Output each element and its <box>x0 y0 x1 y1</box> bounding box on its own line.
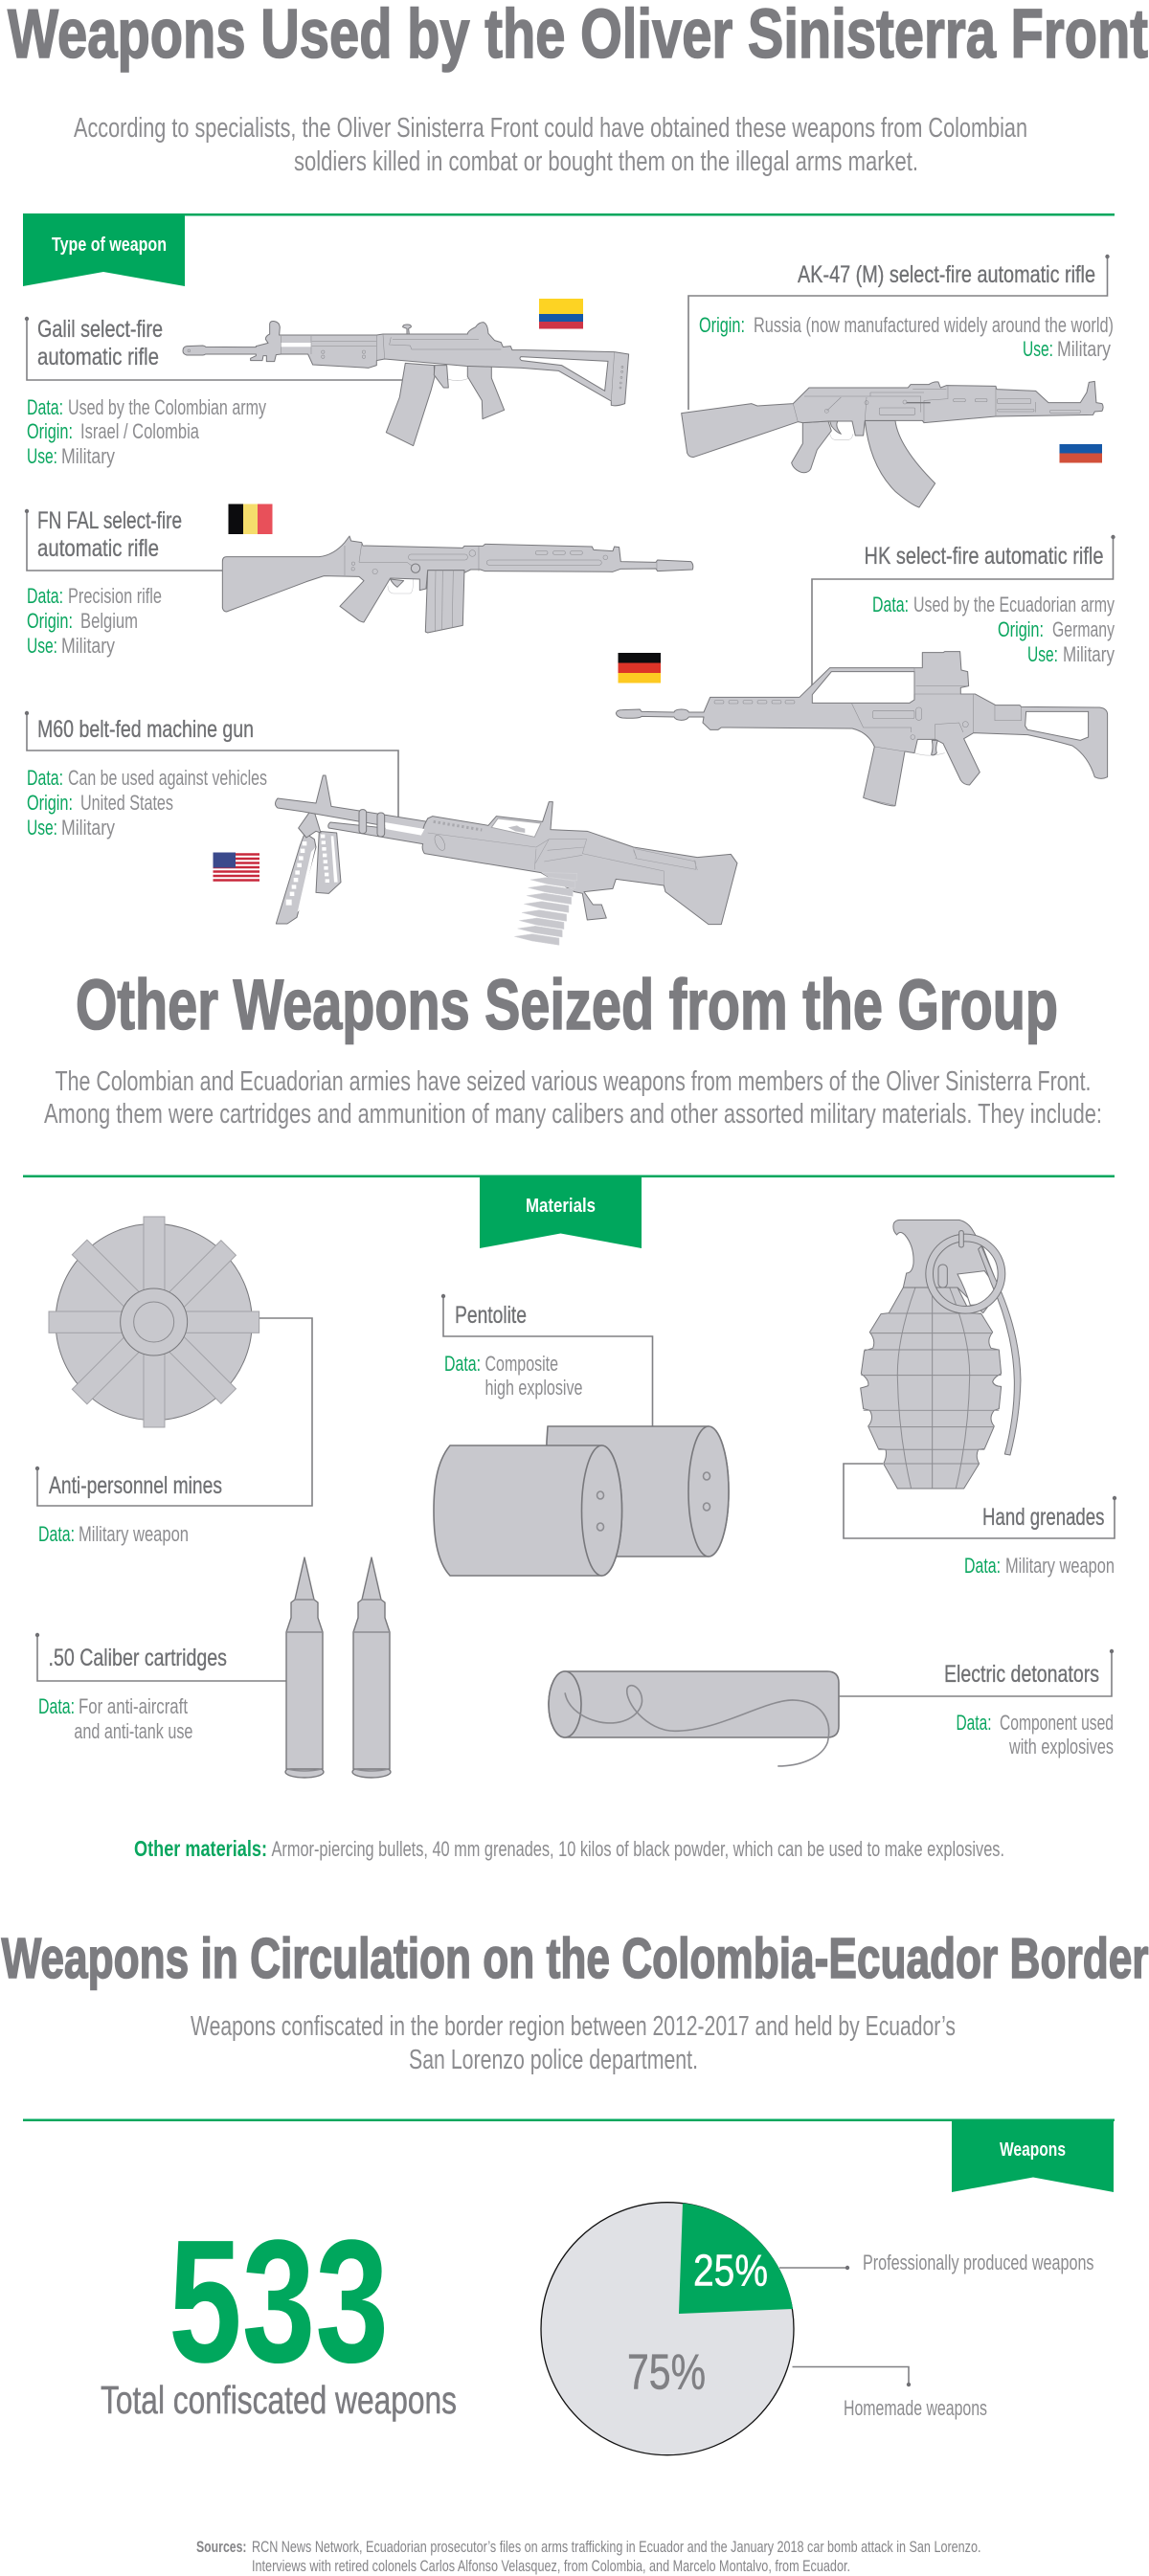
facts: mines: Data: <box>38 1522 75 1546</box>
facts: detonators: Data: <box>956 1711 992 1735</box>
facts: cartridges: and anti-tank use <box>74 1719 192 1743</box>
paragraph: confiscated weapons: San Lorenzo police department. <box>409 2045 698 2075</box>
other materials note <box>134 1836 1004 1861</box>
section rule and ribbon: weapons: Weapons <box>1000 2139 1066 2161</box>
heading: Galil: Galil select-fire <box>37 316 163 343</box>
icon: FN FAL rifle <box>222 536 693 633</box>
section rule and ribbon: type of weapon <box>23 213 1115 286</box>
pie label: 25%: 25% <box>693 2246 768 2296</box>
facts: FN FAL: Belgium <box>80 609 138 633</box>
callout leader: HK <box>812 535 1115 691</box>
intro paragraph <box>74 113 1027 177</box>
callout leader: mines <box>35 1318 312 1506</box>
sources: Sources: <box>196 2538 247 2556</box>
section rule and ribbon: materials: Materials <box>526 1196 596 1217</box>
icon: Belgium flag <box>228 504 272 534</box>
panel: FN FAL <box>25 504 693 658</box>
facts: mines: Military weapon <box>79 1522 189 1546</box>
facts: FN FAL <box>27 584 162 658</box>
facts: detonators: with explosives <box>1008 1735 1114 1758</box>
facts: Galil: Data: <box>27 395 63 419</box>
icon: Russia flag <box>1059 444 1102 463</box>
icon: cartridge left <box>285 1557 324 1778</box>
facts: M60: Military <box>61 816 115 840</box>
icon: Colombia flag <box>539 299 583 329</box>
facts: HK: Data: <box>872 593 909 616</box>
callout leader: grenades <box>844 1464 1116 1538</box>
panel: HK <box>616 535 1115 806</box>
facts: mines <box>38 1522 189 1546</box>
heading: FN FAL: automatic rifle <box>37 535 159 562</box>
heading: FN FAL: FN FAL select-fire <box>37 507 182 534</box>
callout leader: Galil <box>25 317 404 380</box>
pie label: 75%: 75% <box>627 2345 706 2401</box>
facts: M60: Can be used against vehicles <box>68 766 267 790</box>
facts: cartridges <box>38 1694 192 1743</box>
heading: M60: M60 belt-fed machine gun <box>37 716 254 743</box>
facts: grenades: Military weapon <box>1005 1554 1115 1578</box>
icon: Galil rifle <box>183 322 629 446</box>
panel: .50 caliber cartridges <box>35 1557 391 1778</box>
heading: detonators: Electric detonators <box>944 1661 1099 1688</box>
facts: FN FAL: Origin: <box>27 609 73 633</box>
facts: AK-47: Origin: <box>699 313 745 337</box>
facts: AK-47: Use: <box>1023 337 1053 361</box>
callout leader: M60 <box>25 711 398 817</box>
facts: AK-47: Military <box>1057 337 1111 361</box>
facts: HK <box>872 593 1115 666</box>
facts: M60 <box>27 766 267 840</box>
facts: HK: Military <box>1063 642 1115 666</box>
icon: pentolite cylinders <box>434 1426 729 1576</box>
callout leader: AK-47 <box>688 255 1110 410</box>
facts: M60: Use: <box>27 816 57 840</box>
facts: Galil: Origin: <box>27 419 73 443</box>
intro paragraph: soldiers killed in combat or bought them on the illegal arms market. <box>294 146 918 177</box>
icon: AK-47 rifle <box>682 381 1103 507</box>
callout leader: cartridges <box>35 1633 286 1681</box>
panel: Galil <box>25 299 629 468</box>
heading: cartridges: .50 Caliber cartridges <box>48 1645 227 1671</box>
heading: Galil <box>37 316 163 370</box>
facts: FN FAL: Data: <box>27 584 63 608</box>
facts: pentolite: Composite <box>484 1352 558 1376</box>
facts: HK: Origin: <box>998 617 1044 641</box>
other materials note: Other materials: <box>134 1836 267 1861</box>
facts: HK: Germany <box>1052 617 1115 641</box>
callout leader: FN FAL <box>25 509 222 571</box>
facts: M60: Data: <box>27 766 63 790</box>
facts: grenades: Data: <box>964 1554 1001 1578</box>
facts: Galil: Used by the Colombian army <box>68 395 266 419</box>
icon: mine <box>49 1217 259 1427</box>
section rule and ribbon: weapons <box>23 2119 1115 2192</box>
panel: anti-personnel mines <box>35 1217 312 1546</box>
panel: AK-47 <box>682 255 1114 507</box>
big number: 533 total: 533 <box>169 2203 389 2399</box>
facts: Galil <box>27 395 266 468</box>
facts: pentolite <box>444 1352 582 1400</box>
facts: cartridges: Data: <box>38 1694 75 1718</box>
icon: United States flag <box>213 852 259 881</box>
icon: M60 machine gun <box>275 775 737 945</box>
facts: grenades <box>964 1554 1115 1578</box>
panel: M60 <box>25 711 737 945</box>
legend: homemade: Homemade weapons <box>844 2396 987 2420</box>
facts: cartridges: For anti-aircraft <box>79 1694 188 1718</box>
ammunition belt <box>514 873 577 945</box>
facts: detonators <box>956 1711 1114 1758</box>
heading: Galil: automatic rifle <box>37 344 159 370</box>
heading: grenades: Hand grenades <box>982 1504 1105 1531</box>
facts: Galil: Military <box>61 444 115 468</box>
icon: detonator <box>549 1671 839 1766</box>
icon: grenade <box>861 1220 1021 1489</box>
section rule and ribbon: type of weapon: Type of weapon <box>52 235 167 256</box>
sources <box>196 2538 980 2575</box>
facts: HK: Use: <box>1027 642 1058 666</box>
paragraph: confiscated weapons <box>191 2011 956 2075</box>
icon: HK rifle <box>616 652 1108 806</box>
section rule and ribbon: materials <box>23 1176 1115 1248</box>
facts: FN FAL: Use: <box>27 634 57 658</box>
pie chart <box>541 2203 794 2455</box>
sources: Interviews with retired colonels Carlos Alfonso Velasquez, from Colombia, and Marcelo Montalvo, from Ecuador. <box>252 2557 850 2575</box>
paragraph: seized weapons <box>44 1066 1102 1130</box>
legend: homemade <box>793 2366 987 2420</box>
facts: FN FAL: Precision rifle <box>68 584 162 608</box>
panel: hand grenades <box>844 1220 1116 1578</box>
callout leader: detonators <box>839 1649 1114 1696</box>
panel: electric detonators <box>549 1649 1114 1766</box>
facts: M60: Origin: <box>27 791 73 815</box>
heading: FN FAL <box>37 507 182 562</box>
facts: AK-47 <box>699 313 1114 361</box>
heading: mines: Anti-personnel mines <box>49 1472 222 1499</box>
bipod <box>276 812 341 924</box>
facts: M60: United States <box>80 791 173 815</box>
icon: Germany flag <box>619 653 661 683</box>
heading: pentolite: Pentolite <box>455 1302 527 1329</box>
panel: pentolite <box>434 1294 729 1576</box>
facts: Galil: Israel / Colombia <box>80 419 200 443</box>
big number: 533 total: Total confiscated weapons <box>101 2378 457 2422</box>
facts: Galil: Use: <box>27 444 57 468</box>
callout leader: pentolite <box>441 1294 653 1426</box>
facts: pentolite: high explosive <box>484 1376 582 1400</box>
legend: professionally produced <box>779 2251 1093 2274</box>
facts: pentolite: Data: <box>444 1352 481 1376</box>
facts: FN FAL: Military <box>61 634 115 658</box>
icon: cartridge right <box>352 1557 391 1778</box>
